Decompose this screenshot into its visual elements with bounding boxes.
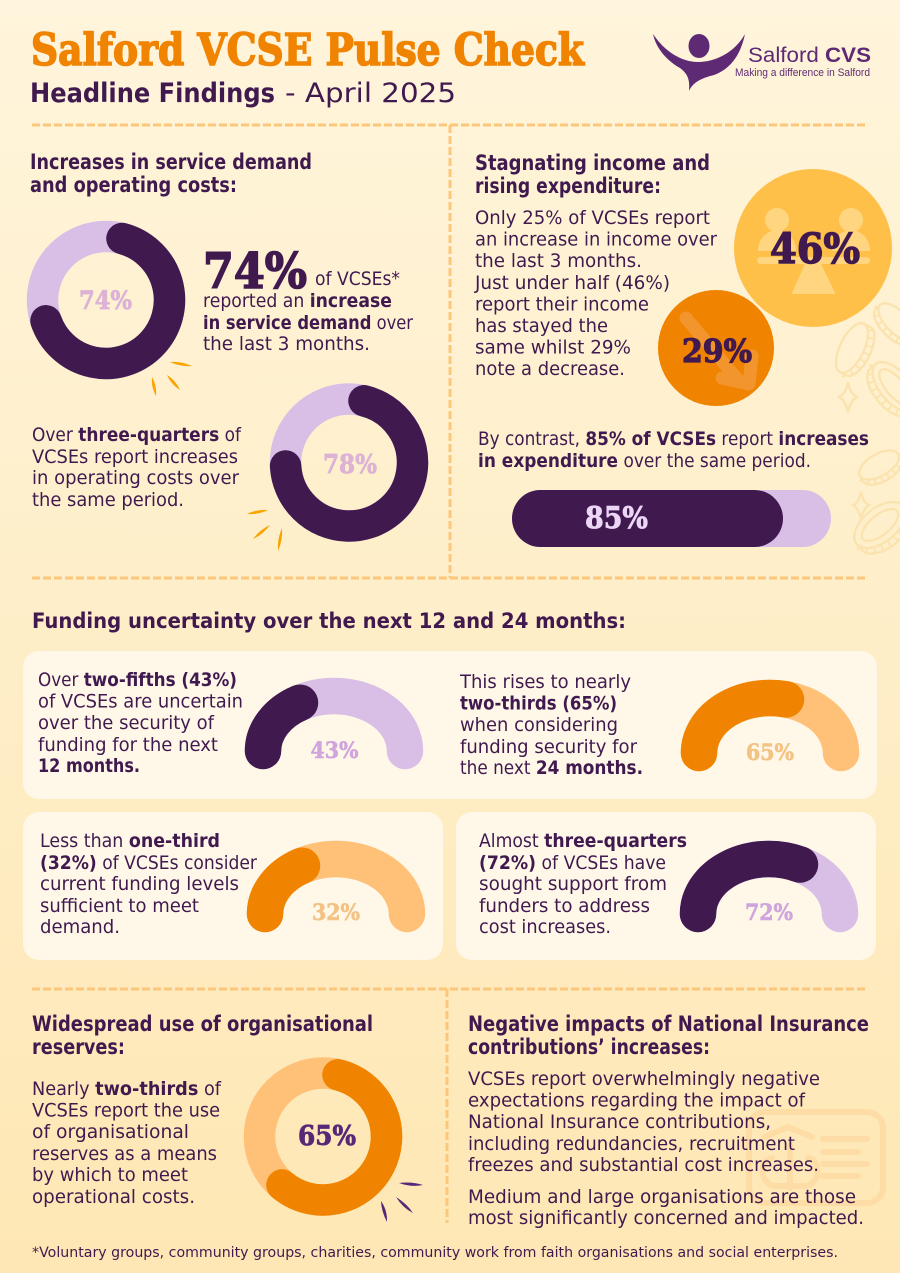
text: 12 months: [38, 669, 243, 777]
text: 12 months: Over two-fifths (43%): [38, 669, 237, 691]
heading: reserves:: [32, 1035, 125, 1059]
arch gauge: 32%: 32%: [312, 900, 360, 926]
heading: [30, 150, 312, 197]
text: income: same whilst 29%: [475, 336, 631, 358]
donut chart: 74%: 74%: [79, 286, 132, 315]
donut chart: 78%: 78%: [323, 450, 377, 480]
text: support from funders: cost increases.: [479, 916, 611, 938]
text: 24 months: funding security for: [460, 736, 637, 758]
stat circle: 29%: 29%: [682, 332, 752, 370]
progress bar: 85%: [512, 490, 831, 547]
footnote: *Voluntary groups, community groups, charities, community work from faith organisations and social enterprises.: [32, 1245, 838, 1261]
decorative coins: [829, 297, 900, 563]
section: organisational reserves: [32, 1012, 423, 1222]
text: organisation size: [468, 1186, 864, 1229]
stat: 74%: [203, 242, 413, 355]
heading: rising expenditure:: [475, 174, 661, 198]
text: negative expectations: including redundancies, recruitment: [468, 1133, 795, 1155]
text: operating costs: VCSEs report increases: [32, 446, 238, 468]
icon: burst: [152, 362, 192, 396]
text: income: Just under half (46%): [474, 272, 670, 294]
text: support from funders: [479, 830, 687, 938]
text: organisation size: Medium and large organisations are those: [468, 1186, 856, 1208]
donut chart: 65%: [260, 1073, 386, 1200]
arch gauge: 65%: [699, 698, 841, 766]
heading: contributions’ increases:: [468, 1035, 710, 1059]
text: operating costs: Over three-quarters of: [32, 424, 242, 446]
heading: [475, 151, 710, 198]
text: reserves: [32, 1078, 222, 1208]
text: 12 months: funding for the next: [38, 734, 218, 756]
text: negative expectations: expectations regarding the impact of: [468, 1090, 806, 1112]
panel: support from funders: [456, 812, 876, 960]
heading: [468, 1012, 869, 1059]
text: expenditure: [478, 428, 869, 472]
text: support from funders: (72%) of VCSEs have: [479, 852, 666, 874]
heading: Widespread use of organisational: [32, 1012, 373, 1036]
text: funding levels: Less than one-third: [40, 830, 220, 852]
text: organisation size: most significantly concerned and impacted.: [468, 1207, 864, 1229]
stat: 74%: reported an increase: [203, 290, 392, 312]
text: 12 months: of VCSEs are uncertain: [38, 690, 243, 712]
text: reserves: reserves as a means: [32, 1143, 217, 1165]
subtitle: [30, 78, 456, 109]
donut chart: 65%: 65%: [298, 1121, 356, 1152]
text: 12 months: 12 months.: [38, 755, 140, 777]
text: operating costs: the same period.: [32, 489, 184, 511]
text: income: Only 25% of VCSEs report: [475, 207, 710, 229]
text: 12 months: over the security of: [38, 712, 215, 734]
arch gauge: 65%: 65%: [746, 740, 794, 766]
text: 24 months: when considering: [460, 714, 618, 736]
subtitle: - April 2025: [285, 78, 456, 109]
text: operating costs: in operating costs over: [32, 467, 239, 489]
arch gauge: 32%: [265, 859, 407, 926]
text: negative expectations: freezes and substantial cost increases.: [468, 1154, 819, 1176]
text: 24 months: This rises to nearly: [459, 671, 631, 693]
text: reserves: Nearly two-thirds of: [32, 1078, 222, 1100]
arch gauge: 72%: [698, 859, 840, 926]
donut chart: 78%: [286, 399, 413, 526]
panel: funding levels: [23, 812, 443, 960]
icon: burst: [247, 510, 282, 551]
panel: funding uncertainty 12 and 24 months: [23, 651, 877, 799]
text: income: [474, 207, 717, 380]
text: funding levels: current funding levels: [40, 873, 239, 895]
icon: burst: [381, 1183, 423, 1222]
text: funding levels: demand.: [40, 916, 120, 938]
arch gauge: 43%: [263, 696, 405, 764]
text: 24 months: two-thirds (65%): [460, 692, 617, 714]
logo: Salford CVS: [653, 34, 871, 91]
text: funding levels: sufficient to meet: [40, 895, 199, 917]
text: income: the last 3 months.: [475, 250, 642, 272]
text: reserves: by which to meet: [32, 1164, 188, 1186]
text: expenditure: in expenditure over the same period.: [478, 450, 811, 472]
stat: 74%: in service demand over: [203, 312, 413, 334]
text: operating costs: [32, 424, 242, 511]
text: support from funders: sought support from: [479, 873, 667, 895]
text: support from funders: funders to address: [479, 895, 650, 917]
logo: Salford CVS: Salford CVS: [748, 44, 871, 67]
text: negative expectations: [468, 1068, 820, 1176]
progress bar: 85%: 85%: [585, 501, 648, 536]
heading: Stagnating income and: [475, 151, 710, 175]
stat: 74%: of VCSEs*: [315, 268, 400, 290]
text: income: has stayed the: [475, 315, 608, 337]
stat circle: 46%: 46%: [770, 225, 860, 273]
heading: funding uncertainty: Funding uncertainty over the next 12 and 24 months:: [32, 609, 626, 633]
subtitle: Headline Findings: [30, 78, 275, 109]
text: 24 months: the next 24 months.: [460, 757, 643, 779]
heading: Increases in service demand: [30, 150, 312, 174]
text: support from funders: Almost three-quarters: [479, 830, 687, 852]
text: reserves: of organisational: [32, 1121, 189, 1143]
section: service demand and operating costs: [30, 150, 413, 551]
decorative National Insurance icon: [749, 1112, 883, 1203]
text: income: an increase in income over: [475, 228, 717, 250]
stat circle: 46%: [734, 169, 892, 327]
text: income: note a decrease.: [475, 358, 625, 380]
text: negative expectations: National Insurance contributions,: [468, 1111, 771, 1133]
arch gauge: 72%: 72%: [745, 900, 793, 926]
stat circle: 29%: [658, 290, 774, 406]
heading: and operating costs:: [30, 173, 237, 197]
heading: [32, 1012, 373, 1059]
title: Salford VCSE Pulse Check: [31, 25, 585, 76]
text: 24 months: [459, 671, 643, 779]
text: reserves: operational costs.: [32, 1186, 195, 1208]
text: negative expectations: VCSEs report overwhelmingly negative: [468, 1068, 820, 1090]
arch gauge: 43%: 43%: [310, 738, 359, 764]
stat: 74%: the last 3 months.: [203, 333, 370, 355]
donut chart: 74%: [42, 236, 170, 364]
text: funding levels: (32%) of VCSEs consider: [40, 852, 257, 874]
text: reserves: VCSEs report the use: [32, 1100, 220, 1122]
section: income and expenditure: [474, 151, 892, 547]
text: funding levels: [40, 830, 257, 938]
stat: 74%: 74%: [203, 242, 307, 300]
section: National Insurance: [468, 1012, 869, 1229]
text: expenditure: By contrast, 85% of VCSEs report increases: [478, 428, 869, 450]
logo: Salford CVS: Making a difference in Salford: [735, 67, 870, 79]
text: income: report their income: [475, 294, 649, 316]
